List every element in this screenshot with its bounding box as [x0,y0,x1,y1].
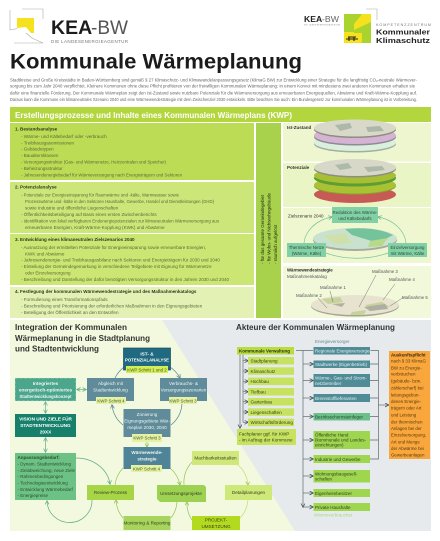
panel: 1. Bestandsanalyse: - Wärme- und Kältebedarf oder -verbrauch [21,134,107,139]
box: Review-Prozess: Review-Prozess [94,490,128,495]
heading: Akteure: Akteure der Kommunalen Wärmeplanung [236,323,395,332]
box: Detailplanungen [225,485,272,500]
label: Energieversorger: Energieversorger [315,339,350,344]
actors: heat consumers: einrichtungen) [315,443,344,448]
panel: 4. Wärmewendestrategie: 4. Festlegung der kommunalen Wärmewendestrategie und des Maßnahmenkatalogs [15,289,197,294]
vertical label column: - räumlich aufgelöst [273,224,278,264]
box: Zonierung: Zonierung [137,412,158,417]
actors: energy suppliers: Brennstofflieferanten [315,396,357,401]
panel: lower background [10,320,431,531]
box: Thermische Netze: Thermische Netze [289,245,325,250]
box: Reduktion des Wärme- und Kältebedarfs: Reduktion des Wärme- [333,210,378,215]
callout: Auskunftspflicht: Gewerbeanlagen [391,453,425,458]
panel: 2. Potenzialanalyse: - Potenziale zur Energieeinsparung für Raumwärme und -kälte, Warmwasser sowie [21,192,179,198]
actors: energy suppliers: Wärme-, Gas- und Strom- [315,376,367,380]
box: Anpassungsbedarf [15,453,76,500]
heading: Integration: Integration der Kommunalen [15,322,127,332]
logo: Kompetenzzentrum Kommunaler Klimaschutz: Kommunaler [376,30,430,36]
actor: Bezirksschornsteinfeger [314,413,370,420]
departments list: Liegenschaften [250,410,282,415]
actors: energy suppliers: Regionale Energieversorger [315,348,372,354]
box: Anpassungsbedarf: - Technologieentwicklung [18,480,68,486]
panel: 1. Bestandsanalyse: - Gebäudetypen [21,147,54,152]
callout: Auskunftspflicht [389,351,430,459]
box: Anpassungsbedarf: - Dynam. Stadtentwicklung [18,462,72,466]
tag: KWP Schritt 3: KWP Schritt 3 [133,436,161,441]
box: IST- und Potenzialanalyse [124,348,170,373]
heading: Integration: Wärmeplanung in die Stadtplanung [15,333,150,343]
panel: 1. Bestandsanalyse: - Baualtersklassen [21,153,59,158]
tag: KWP Schritt 4: KWP Schritt 4 [133,466,161,471]
vertical label column: - für das gesamte Gemeindegebiet [260,194,265,264]
panel: 2. Potenzialanalyse: Prozesswärme und -kälte in den Sektoren Haushalte, Gewerbe, Handel und Dienstleistungen (GHD) [25,199,214,204]
tag: KWP Schritt 1 und 2: KWP Schritt 1 und 2 [127,367,167,372]
actors: energy suppliers [314,347,372,402]
measure labels [296,269,428,308]
box: IST- und Potenzialanalyse: IST- & [140,352,154,356]
box: Monitoring und Reporting: Monitoring & Reporting [124,520,171,526]
box: Integriertes Stadtentwicklungskonzept [15,378,76,401]
logo: Kompetenzzentrum Kommunaler Klimaschutz: DIE LANDESENERGIEAGENTUR [304,24,341,26]
box: Verbrauchs- und Versorgungsszenarien [160,378,207,404]
intro text: sorgung bis zum Jahr 2040 verpflichtet. Kleinere Kommunen ohne diese Pflicht profitieren von der freiwilligen Kommunalen Wärmeplanung: In einem Konvoi mit mindestens zwei anderen Kommunen erhalten sie [10,84,415,88]
actors: heat consumers: Öffentliche Hand [315,432,349,438]
callout: Auskunftspflicht: nach § 33 KlimaG [391,359,426,364]
measure labels: Maßnahme 2 [296,293,322,298]
panel: Potenziale with map layers [283,159,431,207]
box: Vision und Ziele: STADTENTWICKLUNG [20,423,71,428]
measure labels: Maßnahme 5 [402,295,428,300]
actors: heat consumers: Eigenheimbesitzer [315,491,353,496]
callout: Auskunftspflicht: denen Energie- [391,399,422,404]
logo: Kompetenzzentrum Kommunaler Klimaschutz: Klimaschutz [376,38,431,45]
callout: Auskunftspflicht: der thermischen [391,420,423,424]
departments list: Tiefbau [250,390,266,394]
actors: heat consumers [314,431,370,511]
map layers: Ist-Zustand [314,120,396,152]
box: Monitoring und Reporting [124,516,171,530]
panel: 1. Bestandsanalyse: - Beheizungsstruktur [21,166,63,171]
tag: KWP Schritt 3: KWP Schritt 3 [169,398,197,403]
box: Vision und Ziele: VISION UND ZIELE FÜR [19,416,73,422]
box: Integriertes Stadtentwicklungskonzept: Integriertes [33,381,59,386]
box: Kommunale Verwaltung [237,347,294,426]
panel: Ist-Zustand with map layers: Ist-Zustand [287,125,312,130]
box: Anpassungsbedarf: - Rahmenbedingungen [18,474,64,479]
panel: 4. Wärmewendestrategie [10,287,254,318]
box: Verbrauchs- und Versorgungsszenarien: Verbrauchs- & [169,381,198,386]
box: Umsetzungsprojekte: Umsetzungsprojekte [160,491,202,496]
callout: Auskunftspflicht: BW zu Energie- [391,366,422,370]
box: Integriertes Stadtentwicklungskonzept: energetisch-optimiertes [19,388,72,392]
banner heading: Erstellungsprozesse und Inhalte eines Kommunalen Wärmeplans (KWP) [15,110,292,120]
panel: 1. Bestandsanalyse: - Jahresendenergiebedarf für Wärmeversorgung nach Energieträgern und Sektoren [21,172,182,177]
box: Verbrauchs- und Versorgungsszenarien: Versorgungsszenarien [161,388,207,392]
departments list: Gartenbau [250,400,273,404]
box: Zonierung: meplan 2030, 2040 [127,425,167,430]
panel: 1. Bestandsanalyse: - Treibhausgasemissionen [21,140,75,145]
panel: 3. Zielszenario: KWK und Abwärme [25,252,65,256]
tag: KWP Schritt 4: KWP Schritt 4 [97,398,125,403]
double arrows: strategic links [46,390,86,452]
box: Anpassungsbedarf: - Zielabweichung, neue Ziele [18,468,76,473]
box: Wärmewendestrategie: strategie [137,456,157,462]
box: Integriertes Stadtentwicklungskonzept: Stadtentwicklungskonzept [20,394,72,399]
measure labels: Maßnahme 1 [320,285,346,290]
box: Umsetzungsprojekte [157,485,206,502]
box: Vision und Ziele [15,414,76,437]
box: Machbarkeitsstudien [192,451,239,465]
box: Detailplanungen: Detailplanungen [232,490,266,495]
box: Vision und Ziele: 20XX [40,430,52,434]
actors: energy suppliers: Stadtwerke (Eigenbetrieb) [315,362,368,367]
box: Zonierung [124,409,170,442]
box: Thermische Netze: (Wärme, Kälte) [292,251,322,256]
box: Einzelversorgung: Einzelversorgung [391,245,425,250]
actors: energy suppliers: netzbetreiber [315,381,342,386]
callout: Auskunftspflicht: der Abwärme bei [391,446,424,451]
logo: KEA-BW: DIE LANDESENERGIEAGENTUR [51,39,129,44]
callout: Auskunftspflicht: Anlagen bei der [391,426,422,431]
callout: Auskunftspflicht: Einzelversorgung, [391,433,426,438]
panel: 3. Zielszenario: - Ausnutzung der ermittelten Potenziale für Energieeinsparung sowie erneuerbare Energien, [21,245,206,250]
logo: KEA-BW: -BW [91,17,129,39]
callout: Auskunftspflicht: trägern oder Art [391,406,422,411]
box: Fachplaner [237,429,296,445]
callout: Auskunftspflicht: leitungsgebun- [391,392,420,398]
connector lines: actors [240,350,388,507]
departments list: Hochbau [250,379,269,384]
box: IST- und Potenzialanalyse: POTENZIALANALYSE [125,358,169,362]
logo: KEA-BW: KEA [51,17,92,39]
panel: Wärmewendestrategie map [283,266,431,318]
panel: Potenziale with map layers: Potenziale [287,165,310,170]
box: Abgleich mit Stadtentwicklung: Abgleich mit [98,381,124,386]
logo: KEA-BW [10,9,129,44]
box: Reduktion des Wärme- und Kältebedarfs: und Kältebedarfs [338,216,372,221]
box: Wärmewendestrategie: Wärmewende- [131,450,163,455]
panel: 2. Potenzialanalyse: - Identifikation von lokal verfügbaren Endenergiepotenzialen zur klimaneutralen Wärmeversorgung aus [21,218,220,223]
box: Abgleich mit Stadtentwicklung: Stadtentwicklung [93,388,128,392]
box: Anpassungsbedarf: - Entwicklung Wärmebedarf [18,487,74,492]
heading: Integration: und Stadtentwicklung [15,344,99,354]
box: Projekt-Umsetzung: UMSETZUNG [201,524,231,529]
panel: 3. Zielszenario [10,234,254,285]
box: Fachplaner: - im Auftrag der Kommune [239,438,293,442]
callout: Auskunftspflicht: Art und Menge [391,440,420,444]
box: Zonierung: Eignungsgebiete Wär- [124,418,170,424]
box: Projekt-Umsetzung: PROJEKT- [205,518,228,522]
actors: heat consumers: Industrie und Gewerbe [315,457,361,462]
vertical label column [256,123,281,318]
panel: 3. Zielszenario: 3. Entwicklung eines klimaneutralen Zielszenarios 2040 [15,237,135,242]
box: Projekt-Umsetzung [192,516,240,530]
panel: 3. Zielszenario: oder Einzelversorgung [25,270,71,276]
box: Einzelversorgung: mit Wärme, Kälte [391,251,425,256]
panel: Wärmewendestrategie map: Wärmewendestrategie [287,268,333,272]
panel: 3. Zielszenario: - Einteilung der Gemeindegemarkung in verschiedene Teilgebiete mit Eignung für Wärmenetze [21,264,212,269]
cycle arrows around map [304,217,406,258]
panel: 2. Potenzialanalyse: - Öffentlichkeitsbeteiligung auf Basis eines ersten Zwischenberichts [21,211,157,217]
panel: 2. Potenzialanalyse: 2. Potenzialanalyse [15,184,57,190]
box: Anpassungsbedarf: Anpassungsbedarf: [18,455,60,460]
box: Einzelversorgung [388,243,427,257]
departments list: Klimaschutz [250,369,276,374]
logo: Kompetenzzentrum Kommunaler Klimaschutz [304,9,431,45]
map layers: Potenziale [314,159,396,203]
box: Kommunale Verwaltung: Kommunale Verwaltung [239,348,290,354]
panel: Ist-Zustand with map layers [283,120,431,162]
measure labels: Maßnahme 4 [389,277,415,282]
departments list: Stadtplanung [250,358,278,364]
logo: Kompetenzzentrum Kommunaler Klimaschutz: KEA [304,14,322,24]
panel: 2. Potenzialanalyse: erneuerbaren Energien, Kraft-Wärme-Kopplung (KWK) und Abwärme [25,225,165,230]
intro text: dafür eine finanzielle Förderung. Der Kommunale Wärmeplan zeigt den Ist-Zustand sowie nutzbare Potenziale für die Wärmeversorgung aus erneuerbaren Energiequellen, Abwärme und Kraft-Wärme-Kopplung auf. [10,90,417,96]
callout: Auskunftspflicht: zählerscharf) bei [391,386,423,390]
title: Kommunale Wärmeplanung [10,50,302,74]
box: Abgleich mit Stadtentwicklung [87,378,134,404]
departments list [248,357,294,426]
panel: Zielszenario 2040: Zielszenario 2040 [288,214,324,218]
intro text [10,78,417,102]
cycle arrows: planning loop [112,367,182,447]
map: Maßnahmen [311,295,399,316]
actors: heat consumers: Private Haushalte [315,505,351,510]
panel: 4. Wärmewendestrategie: - Beschreibung und Priorisierung der erforderlichen Maßnahmen in den Eignungsgebieten [21,304,203,308]
panel: 3. Zielszenario: - Beschreibung und Darstellung der dafür benötigten Versorgungsstruktur in den Jahren 2030 und 2040 [21,277,230,282]
panel: Wärmewendestrategie map: Maßnahmenkatalog [287,274,327,279]
box: Machbarkeitsstudien: Machbarkeitsstudien [194,456,237,460]
map: Zielszenario [313,228,397,251]
box: Thermische Netze [287,243,326,257]
callout: Auskunftspflicht: und Leistung [391,412,417,418]
departments list: Wirtschaftsförderung [250,420,293,425]
cycle arrows: review loop [47,458,248,523]
panel: 3. Zielszenario: - Jahresendenergie- und Treibhausgasbilanz nach Sektoren und Energieträgern für 2030 und 2040 [21,258,220,263]
panel: Zielszenario 2040 [283,207,431,263]
label: Wärmeverbraucher: Wärmeverbraucher [314,512,353,518]
vertical label column: - für Wohn- und Nichtwohngebäude [266,193,272,264]
panel: 1. Bestandsanalyse: 1. Bestandsanalyse [15,126,58,132]
box: Anpassungsbedarf: - Energiepreise [18,493,49,498]
actors: heat consumers: Wohnungsbaugesell- [315,472,358,476]
panel: 4. Wärmewendestrategie: - Beteiligung der Öffentlichkeit an den Entwürfen [21,309,119,315]
box: Review-Prozess [87,485,134,500]
panel: 1. Bestandsanalyse [10,123,254,180]
callout: Auskunftspflicht: verbräuchen [391,372,416,377]
panel: 4. Wärmewendestrategie: - Formulierung eines Transformationspfads [21,297,108,302]
panel: 2. Potenzialanalyse [10,182,254,233]
callout: Auskunftspflicht: (gebäude- bzw. [391,378,421,384]
panel: 1. Bestandsanalyse: - Versorgungsstruktur (Gas- und Wärmenetze, Heizzentralen und Speicher) [21,160,166,164]
actor: Bezirksschornsteinfeger: Bezirksschornsteinfeger [315,414,364,420]
measure labels: Maßnahme 3 [372,269,398,274]
actors: heat consumers: schaften [315,477,333,482]
panel: 2. Potenzialanalyse: sowie Industrie und öffentliche Liegenschaften [25,206,119,210]
actors: heat consumers: (kommunale und Landes- [315,438,367,442]
box: Fachplaner: Fachplaner ggf. für KWP [239,432,289,436]
box: Reduktion des Wärme- und Kältebedarfs [332,207,378,223]
banner heading [10,107,431,122]
intro text: Stadtkreise und Große Kreisstädte in Baden-Württemberg sind gemäß § 27 Klimaschutz- und Klimawandelanpassungsgesetz (KlimaG BW) zur Entwicklung einer Strategie für die langfristig CO₂-neutrale Wärmever- [10,78,417,82]
callout: Auskunftspflicht: Auskunftspflicht [391,352,426,358]
heading: Integration [15,322,150,354]
logo: Kompetenzzentrum Kommunaler Klimaschutz: KOMPETENZZENTRUM [376,23,431,27]
box: Wärmewendestrategie [124,447,170,472]
logo: Kompetenzzentrum Kommunaler Klimaschutz: -BW [322,14,340,24]
